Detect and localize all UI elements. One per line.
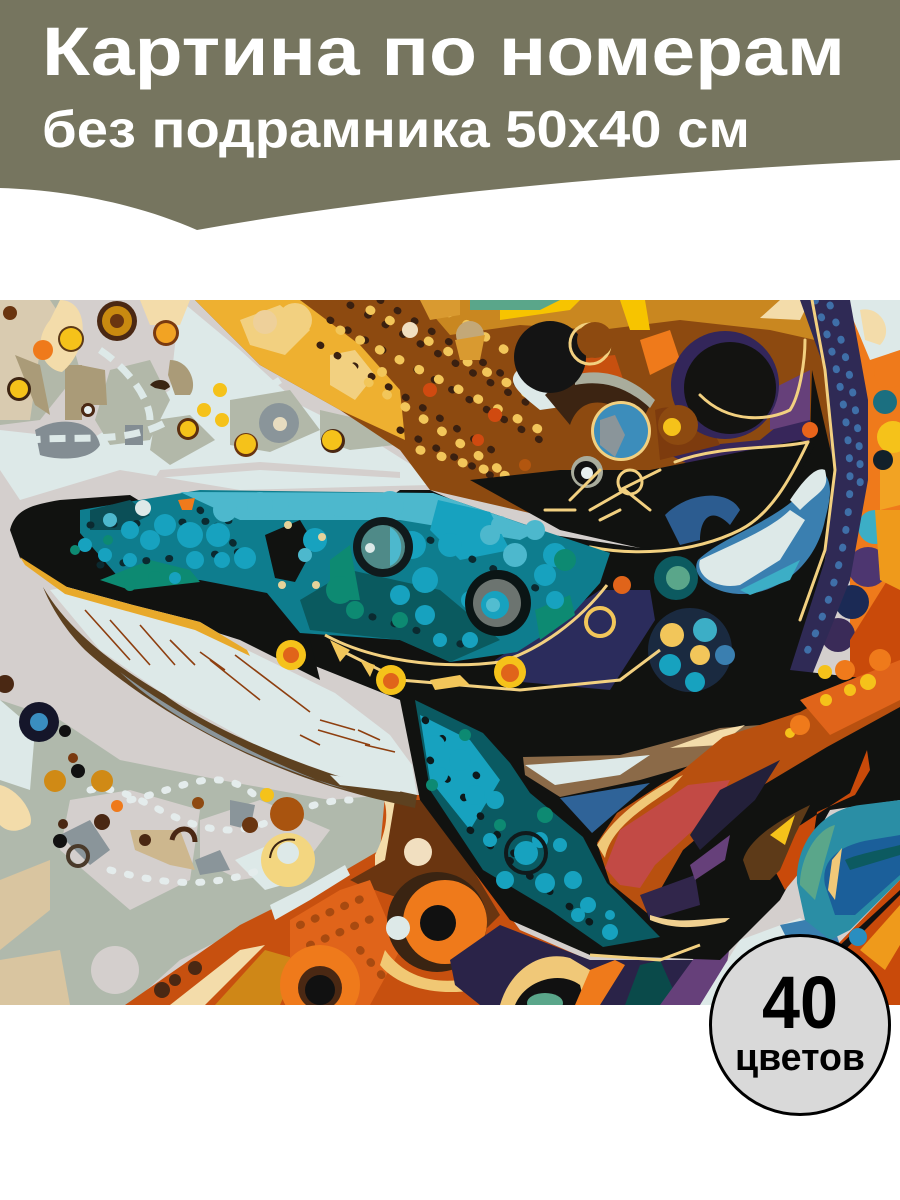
teal swirl and jewel xyxy=(654,556,698,600)
black crescent region xyxy=(470,440,815,548)
whale head teal xyxy=(80,490,610,662)
jewel cluster xyxy=(648,608,735,692)
whale eye two xyxy=(465,570,531,636)
whale upper jaw snout in black xyxy=(10,495,320,680)
bottom gold curve xyxy=(590,945,700,960)
bottom left orange panel xyxy=(125,795,728,1005)
background: lower left silver area xyxy=(0,700,385,1005)
orange and red flipper xyxy=(597,649,900,927)
whale eye one xyxy=(353,517,413,577)
teal fin xyxy=(415,700,660,947)
large black circle with purple rim xyxy=(671,331,779,439)
subtitle: без подрамника 50х40 см xyxy=(42,101,750,159)
white streak above flipper xyxy=(523,725,760,797)
right orange ornament panel xyxy=(821,300,900,700)
background: upper left mottled area xyxy=(0,300,432,500)
gold dots top left xyxy=(3,301,345,457)
teal and blue swirl at right xyxy=(797,800,900,940)
badge: 40 colours: 40 xyxy=(762,961,838,1044)
orange lower right segment xyxy=(837,880,900,1005)
bottom purple and ring panel xyxy=(450,918,840,1005)
badge: 40 colours: цветов xyxy=(735,1037,865,1079)
blue triangle xyxy=(560,783,650,833)
painting: whale xyxy=(0,300,900,1025)
teal head scale dots xyxy=(70,491,576,648)
large black circle top xyxy=(514,321,586,393)
blue circle with ring xyxy=(591,401,651,461)
badge: 40 colours xyxy=(710,936,890,1114)
orange flame at right xyxy=(743,750,870,890)
right purple ribbon xyxy=(790,300,868,672)
top gold and brown panel xyxy=(195,300,831,513)
title: Картина по номерам xyxy=(42,13,845,90)
dark beads lower left xyxy=(0,675,315,887)
white belly xyxy=(20,557,417,808)
small white eye xyxy=(571,456,603,488)
red brown dots in gold panel xyxy=(253,300,818,471)
blue and white swoosh xyxy=(696,469,830,595)
purple band below head xyxy=(495,590,655,690)
whale body in black xyxy=(250,370,900,960)
gold underline with pendants xyxy=(276,576,660,695)
gold lines in crescent xyxy=(545,300,835,620)
title banner shape xyxy=(0,0,900,230)
dark blue swirl xyxy=(665,496,740,545)
